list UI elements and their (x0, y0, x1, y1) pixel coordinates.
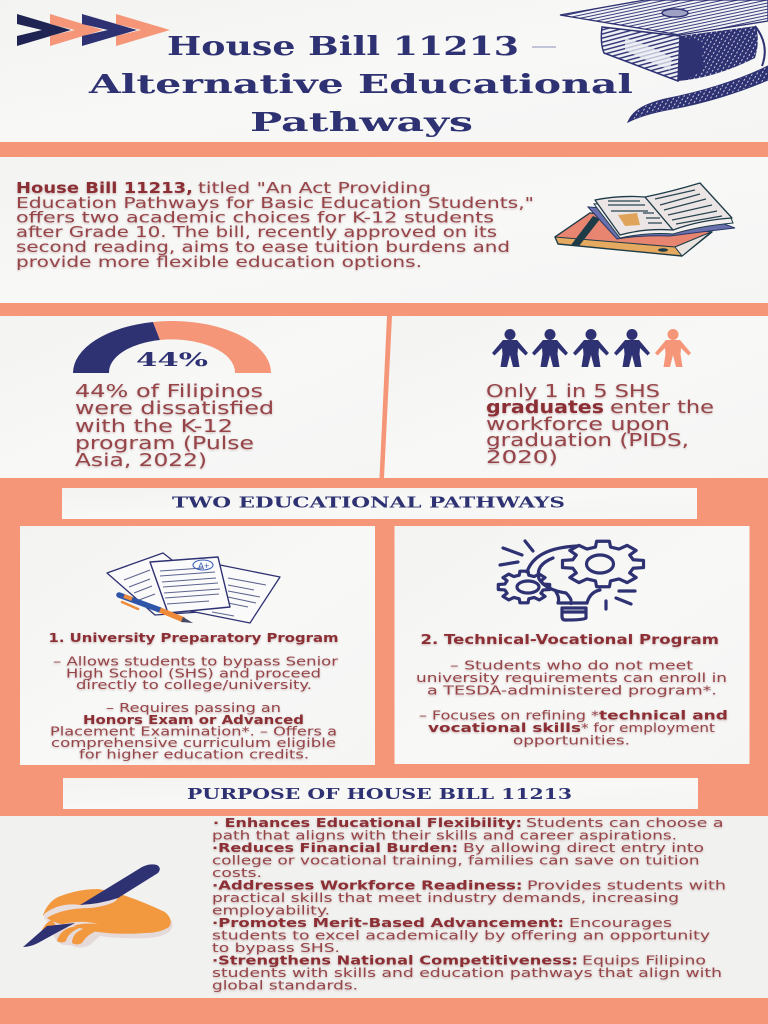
vocational program text: university requirements can enroll in (416, 670, 727, 685)
vocational program text: – Focuses on refining * (419, 708, 599, 722)
panel: statistics right (384, 316, 768, 478)
vocational program text: opportunities. (513, 732, 630, 748)
panel: university preparatory program (20, 526, 375, 765)
icon: exam papers and pen (107, 553, 280, 623)
purpose text (212, 815, 726, 992)
university program text: 1. University Preparatory Program (48, 630, 338, 645)
stat text: dissatisfied: Asia, 2022) (75, 451, 207, 471)
icon: lightbulb with gears (498, 541, 644, 620)
icon: five people (492, 329, 691, 367)
icon: hand writing with pen (23, 864, 172, 948)
title: Alternative Educational (87, 69, 633, 100)
purpose text: By allowing direct entry into (463, 840, 704, 855)
vocational program text: – Students who do not meet (450, 658, 693, 672)
vocational program text: a TESDA-administered program*. (427, 682, 717, 698)
stat text: graduates: 2020) (486, 448, 558, 468)
intro text: offers two academic choices for K-12 students (16, 208, 494, 226)
heading: two educational pathways (62, 488, 697, 519)
title: Pathways (250, 107, 473, 138)
purpose text: to bypass SHS. (212, 940, 340, 955)
stat text: dissatisfied: with the K-12 (75, 417, 233, 437)
stat text: graduates: graduates (486, 398, 604, 418)
vocational program text (416, 633, 728, 748)
purpose text: path that aligns with their skills and career aspirations. (212, 828, 677, 842)
purpose text: ·Addresses Workforce Readiness: (212, 878, 522, 892)
intro text: second reading, aims to ease tuition burdens and (16, 238, 510, 256)
stat text: graduates (486, 382, 714, 468)
panel: introduction (0, 157, 768, 303)
header panel (0, 0, 768, 142)
purpose text: college or vocational training, families can save on tuition (212, 852, 700, 868)
university program text: – Requires passing an (106, 700, 281, 715)
university program text: – Allows students to bypass Senior (53, 654, 339, 668)
panel: statistics left (0, 316, 387, 478)
panel: purpose (0, 815, 768, 998)
stat text: graduates: graduation (PIDS, (486, 431, 689, 451)
vocational program text: vocational skills (428, 720, 581, 735)
intro text: titled "An Act Providing (198, 179, 431, 197)
chart: 44% gauge (73, 321, 271, 373)
icon: chevron arrows (17, 14, 170, 46)
heading: purpose of house bill (63, 778, 698, 809)
stat text: graduates: Only 1 in 5 SHS (486, 382, 660, 402)
purpose text: global standards. (212, 978, 358, 992)
purpose text: Encourages (569, 915, 672, 930)
chart: 44% gauge: 44% (136, 349, 208, 371)
panel: technical-vocational program (394, 526, 750, 764)
icon: exam papers and pen: A+ (198, 561, 209, 571)
purpose text: employability. (212, 902, 330, 918)
intro text: Education Pathways for Basic Education Students," (16, 194, 534, 212)
vocational program text: 2. Technical-Vocational Program (420, 633, 719, 648)
university program text: Honors Exam or Advanced (83, 712, 304, 727)
icon: graduation cap (560, 0, 768, 122)
intro text: provide more flexible education options. (16, 253, 422, 271)
vocational program text: * for employment (581, 720, 715, 735)
university program text: comprehensive curriculum eligible (51, 735, 336, 750)
purpose text: students to excel academically by offering an opportunity (212, 928, 711, 942)
intro text (16, 179, 534, 271)
intro text: House Bill 11213, (16, 179, 193, 197)
heading: two educational pathways: TWO EDUCATIONAL PATHWAYS (172, 494, 565, 512)
purpose text: ·Promotes Merit-Based Advancement: (212, 915, 564, 930)
title (87, 31, 633, 138)
purpose text: Equips Filipino (582, 952, 706, 968)
heading: purpose of house bill: PURPOSE OF HOUSE BILL 11213 (187, 785, 572, 803)
purpose text: Students can choose a (526, 815, 724, 830)
purpose text: ·Reduces Financial Burden: (212, 840, 458, 855)
university program text: High School (SHS) and proceed (66, 666, 321, 680)
university program text: directly to college/university. (76, 677, 312, 692)
stat text: dissatisfied: were dissatisfied (75, 399, 274, 419)
icon: books (555, 183, 735, 256)
purpose text: Provides students with (527, 878, 726, 892)
stat text: graduates: enter the (610, 398, 714, 418)
purpose text: costs. (212, 865, 262, 880)
university program text: for higher education credits. (79, 746, 309, 762)
purpose text: ·Strengthens National Competitiveness: (212, 952, 578, 968)
title: House Bill 11213 (167, 31, 519, 62)
university program text (48, 630, 339, 762)
university program text: Placement Examination*. – Offers a (50, 724, 337, 738)
stat text: graduates: workforce upon (486, 415, 670, 435)
vocational program text: technical and (599, 708, 728, 722)
stat text: dissatisfied: program (Pulse (75, 434, 254, 454)
stat text: dissatisfied (75, 382, 274, 471)
intro text: after Grade 10. The bill, recently approved on its (16, 223, 497, 241)
stat text: dissatisfied: 44% of Filipinos (75, 382, 263, 402)
purpose text: practical skills that meet industry demands, increasing (212, 890, 679, 905)
purpose text: students with skills and education pathways that align with (212, 965, 722, 980)
purpose text: · Enhances Educational Flexibility: (213, 815, 522, 830)
